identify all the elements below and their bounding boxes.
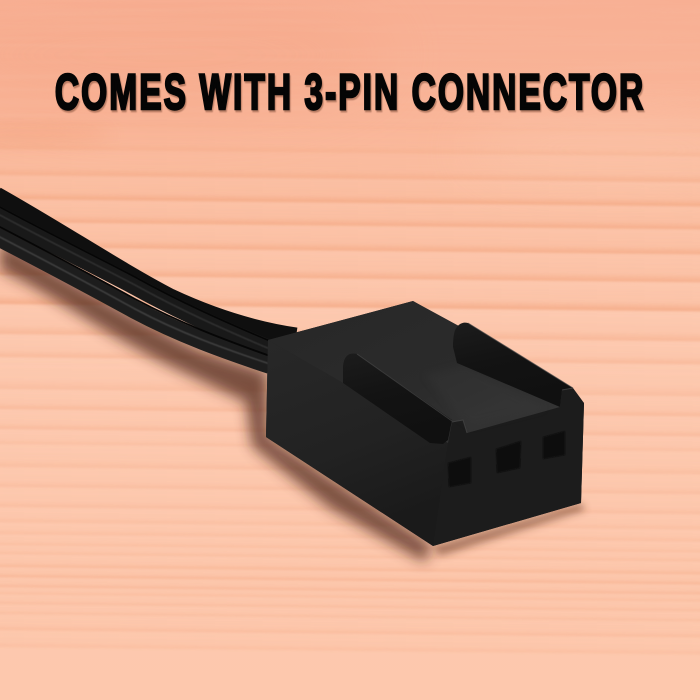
shadow: cables and connector [0,240,585,562]
side face [266,340,448,546]
title: COMES WITH 3-PIN CONNECTOR [55,64,643,121]
left rail [343,354,452,444]
connector housing [266,301,584,546]
hole 1 [448,457,471,487]
front face [433,388,584,546]
wire 1 [0,196,296,337]
title: COMES WITH 3-PIN CONNECTOR [56,66,644,123]
pin holes [448,431,565,487]
body silhouette [266,301,584,546]
hole 3 [543,431,565,459]
wire separation and highlights [0,205,270,364]
top face [268,301,573,443]
recess highlight [425,365,545,426]
wire 3 [0,236,270,365]
rail highlight edges [357,323,573,433]
wire 2 [0,214,272,350]
hole 2 [496,441,521,473]
right rail [453,323,573,407]
cable: three black wires [0,196,296,365]
